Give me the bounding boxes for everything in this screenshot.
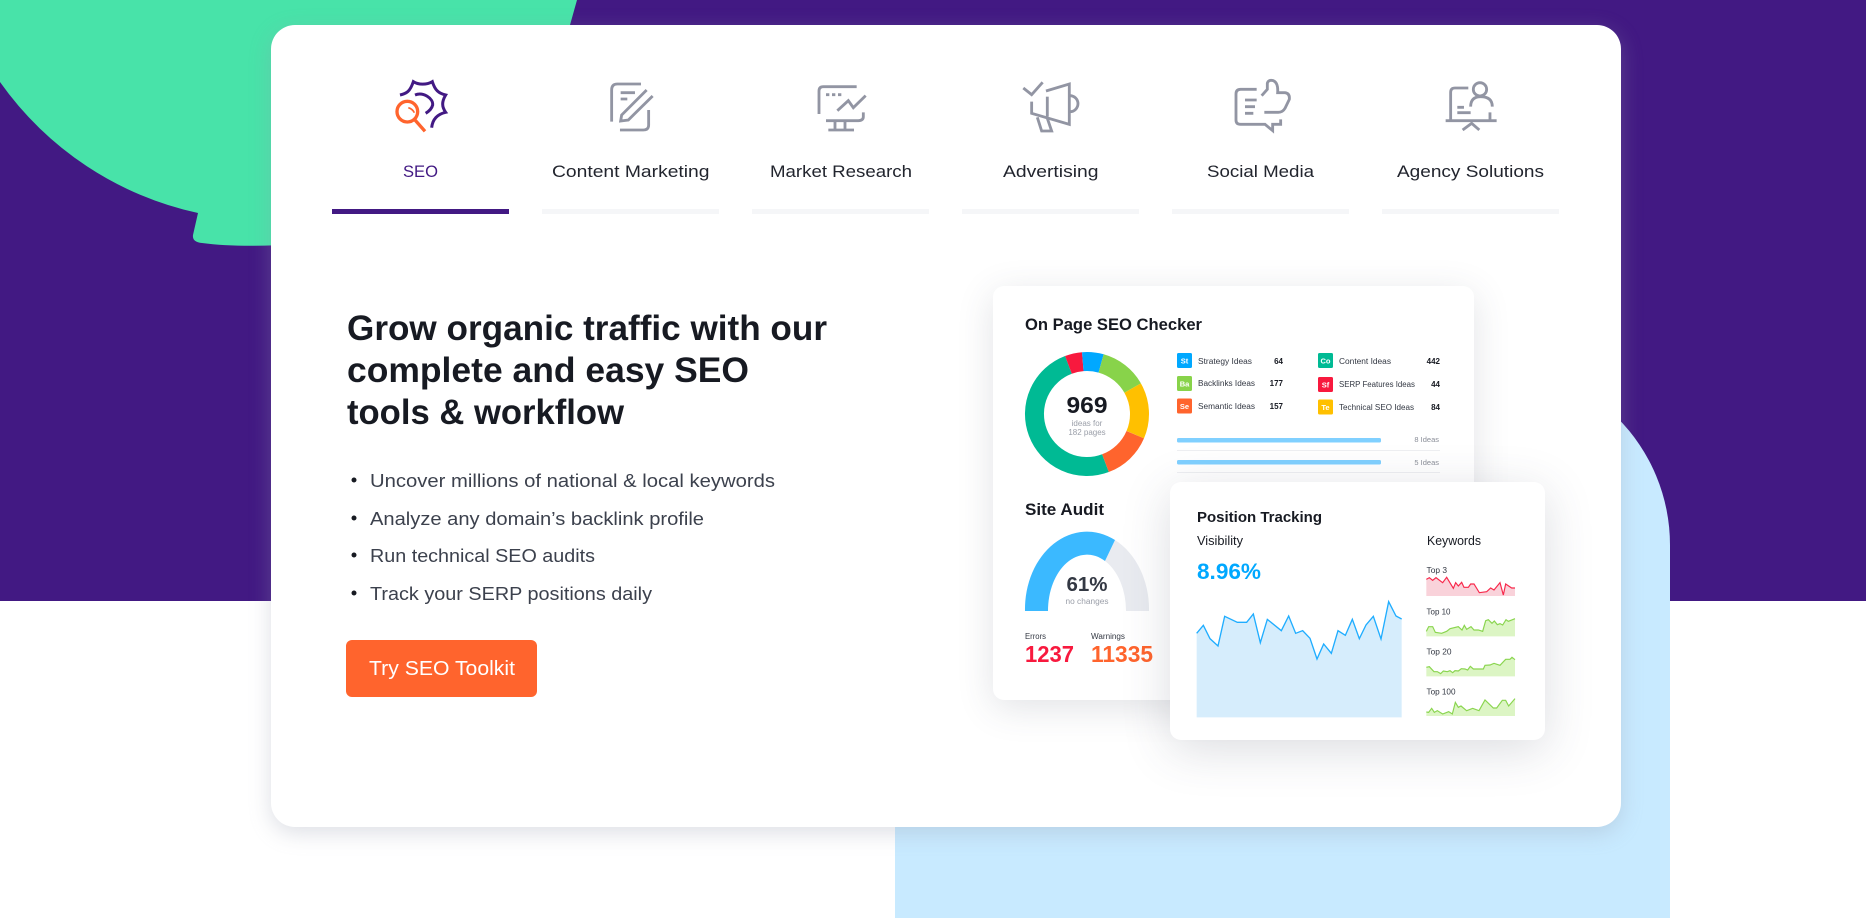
icon: document and pencil (612, 84, 653, 130)
icon: gear with magnifier (397, 82, 446, 131)
tab: Market Research: Market Research (770, 162, 912, 181)
icon: speech bubble with thumb up (1236, 80, 1289, 131)
tab: Social Media (1172, 80, 1349, 214)
sparkline: Top 3: Top 3 (1426, 566, 1448, 575)
sparkline: Top 100 (1426, 688, 1515, 716)
heading: tools & workflow (347, 393, 625, 432)
legend: idea types: St (1181, 356, 1189, 366)
heading: complete and easy SEO (347, 351, 749, 390)
background: purple band (0, 0, 1866, 601)
legend: idea types: 84 (1431, 403, 1441, 412)
tab: Content Marketing: Content Marketing (552, 162, 710, 181)
area chart: visibility (1197, 602, 1402, 717)
legend: idea types: 44 (1431, 380, 1441, 389)
legend: idea types: Co (1320, 356, 1331, 366)
value: 8.96%: 8.96% (1197, 559, 1261, 584)
sparkline: Top 10: Top 10 (1426, 608, 1451, 616)
sparkline: Top 10 (1426, 608, 1515, 636)
bars: ideas per page: 5 Ideas (1414, 458, 1439, 467)
tab: SEO: SEO (403, 162, 438, 181)
tab: Market Research (752, 87, 929, 214)
tab: Agency Solutions: Agency Solutions (1397, 162, 1544, 181)
label: Visibility: Visibility (1197, 534, 1244, 548)
sparkline: Top 20: Top 20 (1426, 648, 1452, 656)
tab: Content Marketing (542, 84, 719, 214)
label: Keywords: Keywords (1427, 534, 1481, 548)
tab: Advertising (962, 82, 1139, 214)
heading: Grow organic traffic with our (347, 309, 827, 348)
donut chart (1034, 361, 1139, 467)
sparkline: Top 100: Top 100 (1426, 688, 1456, 696)
legend: idea types: Semantic Ideas (1198, 402, 1255, 411)
legend: idea types: 64 (1274, 357, 1284, 366)
legend: idea types: 177 (1270, 379, 1284, 388)
legend: idea types: 442 (1427, 357, 1441, 366)
bars: ideas per page: 8 Ideas (1414, 435, 1439, 444)
gauge chart: 61%: no changes (1066, 597, 1108, 606)
stat: Warnings: 11335 (1091, 641, 1153, 667)
tab: Social Media: Social Media (1207, 162, 1315, 181)
bullet list: Track your SERP positions daily (370, 584, 652, 604)
stat: Errors: Errors (1025, 632, 1046, 641)
gauge chart: 61%: 61% (1066, 574, 1108, 596)
icon: monitor with chart (819, 87, 866, 130)
bullet list: Run technical SEO audits (370, 546, 595, 566)
button: Try SEO Toolkit (346, 640, 537, 697)
sparkline: Top 20 (1426, 648, 1515, 676)
donut chart: ideas for (1072, 419, 1103, 428)
legend: idea types: Te (1321, 403, 1330, 412)
heading: Site Audit: Site Audit (1025, 500, 1104, 519)
button: Try SEO Toolkit: Try SEO Toolkit (369, 658, 515, 680)
background: green bubble shape (0, 0, 577, 246)
bullet list (352, 471, 775, 604)
icon: presenter at board (1446, 83, 1497, 130)
legend: idea types: SERP Features Ideas (1339, 380, 1415, 389)
legend: idea types: Sf (1322, 380, 1330, 390)
bullet list: Uncover millions of national & local keywords (370, 471, 775, 491)
gauge chart: 61% (1025, 532, 1149, 611)
legend: idea types: Ba (1180, 380, 1190, 388)
tab: Agency Solutions (1382, 83, 1559, 214)
icon: megaphone with check (1023, 82, 1078, 131)
stat: Errors: 1237 (1025, 641, 1074, 667)
stat: Warnings: Warnings (1091, 632, 1125, 641)
legend: idea types (1177, 353, 1441, 414)
heading: On Page SEO Checker: On Page SEO Checker (1025, 315, 1202, 334)
main white card (271, 25, 1621, 827)
tab: SEO (332, 82, 509, 214)
legend: idea types: 157 (1270, 402, 1284, 411)
donut chart: 969 (1066, 392, 1108, 418)
legend: idea types: Technical SEO Ideas (1339, 403, 1414, 412)
panel: On Page SEO Checker and Site Audit (993, 286, 1474, 700)
legend: idea types: Strategy Ideas (1198, 357, 1252, 366)
bars: ideas per page (1177, 435, 1440, 472)
legend: idea types: Se (1180, 402, 1189, 411)
tab: Advertising: Advertising (1003, 162, 1098, 181)
donut chart: 182 pages (1068, 428, 1106, 437)
sparkline: Top 3 (1426, 566, 1515, 596)
heading: Position Tracking: Position Tracking (1197, 510, 1322, 526)
heading (347, 309, 827, 432)
panel: Position Tracking (1170, 482, 1545, 740)
legend: idea types: Content Ideas (1339, 357, 1391, 366)
legend: idea types: Backlinks Ideas (1198, 379, 1255, 388)
bullet list: Analyze any domain’s backlink profile (370, 509, 704, 529)
